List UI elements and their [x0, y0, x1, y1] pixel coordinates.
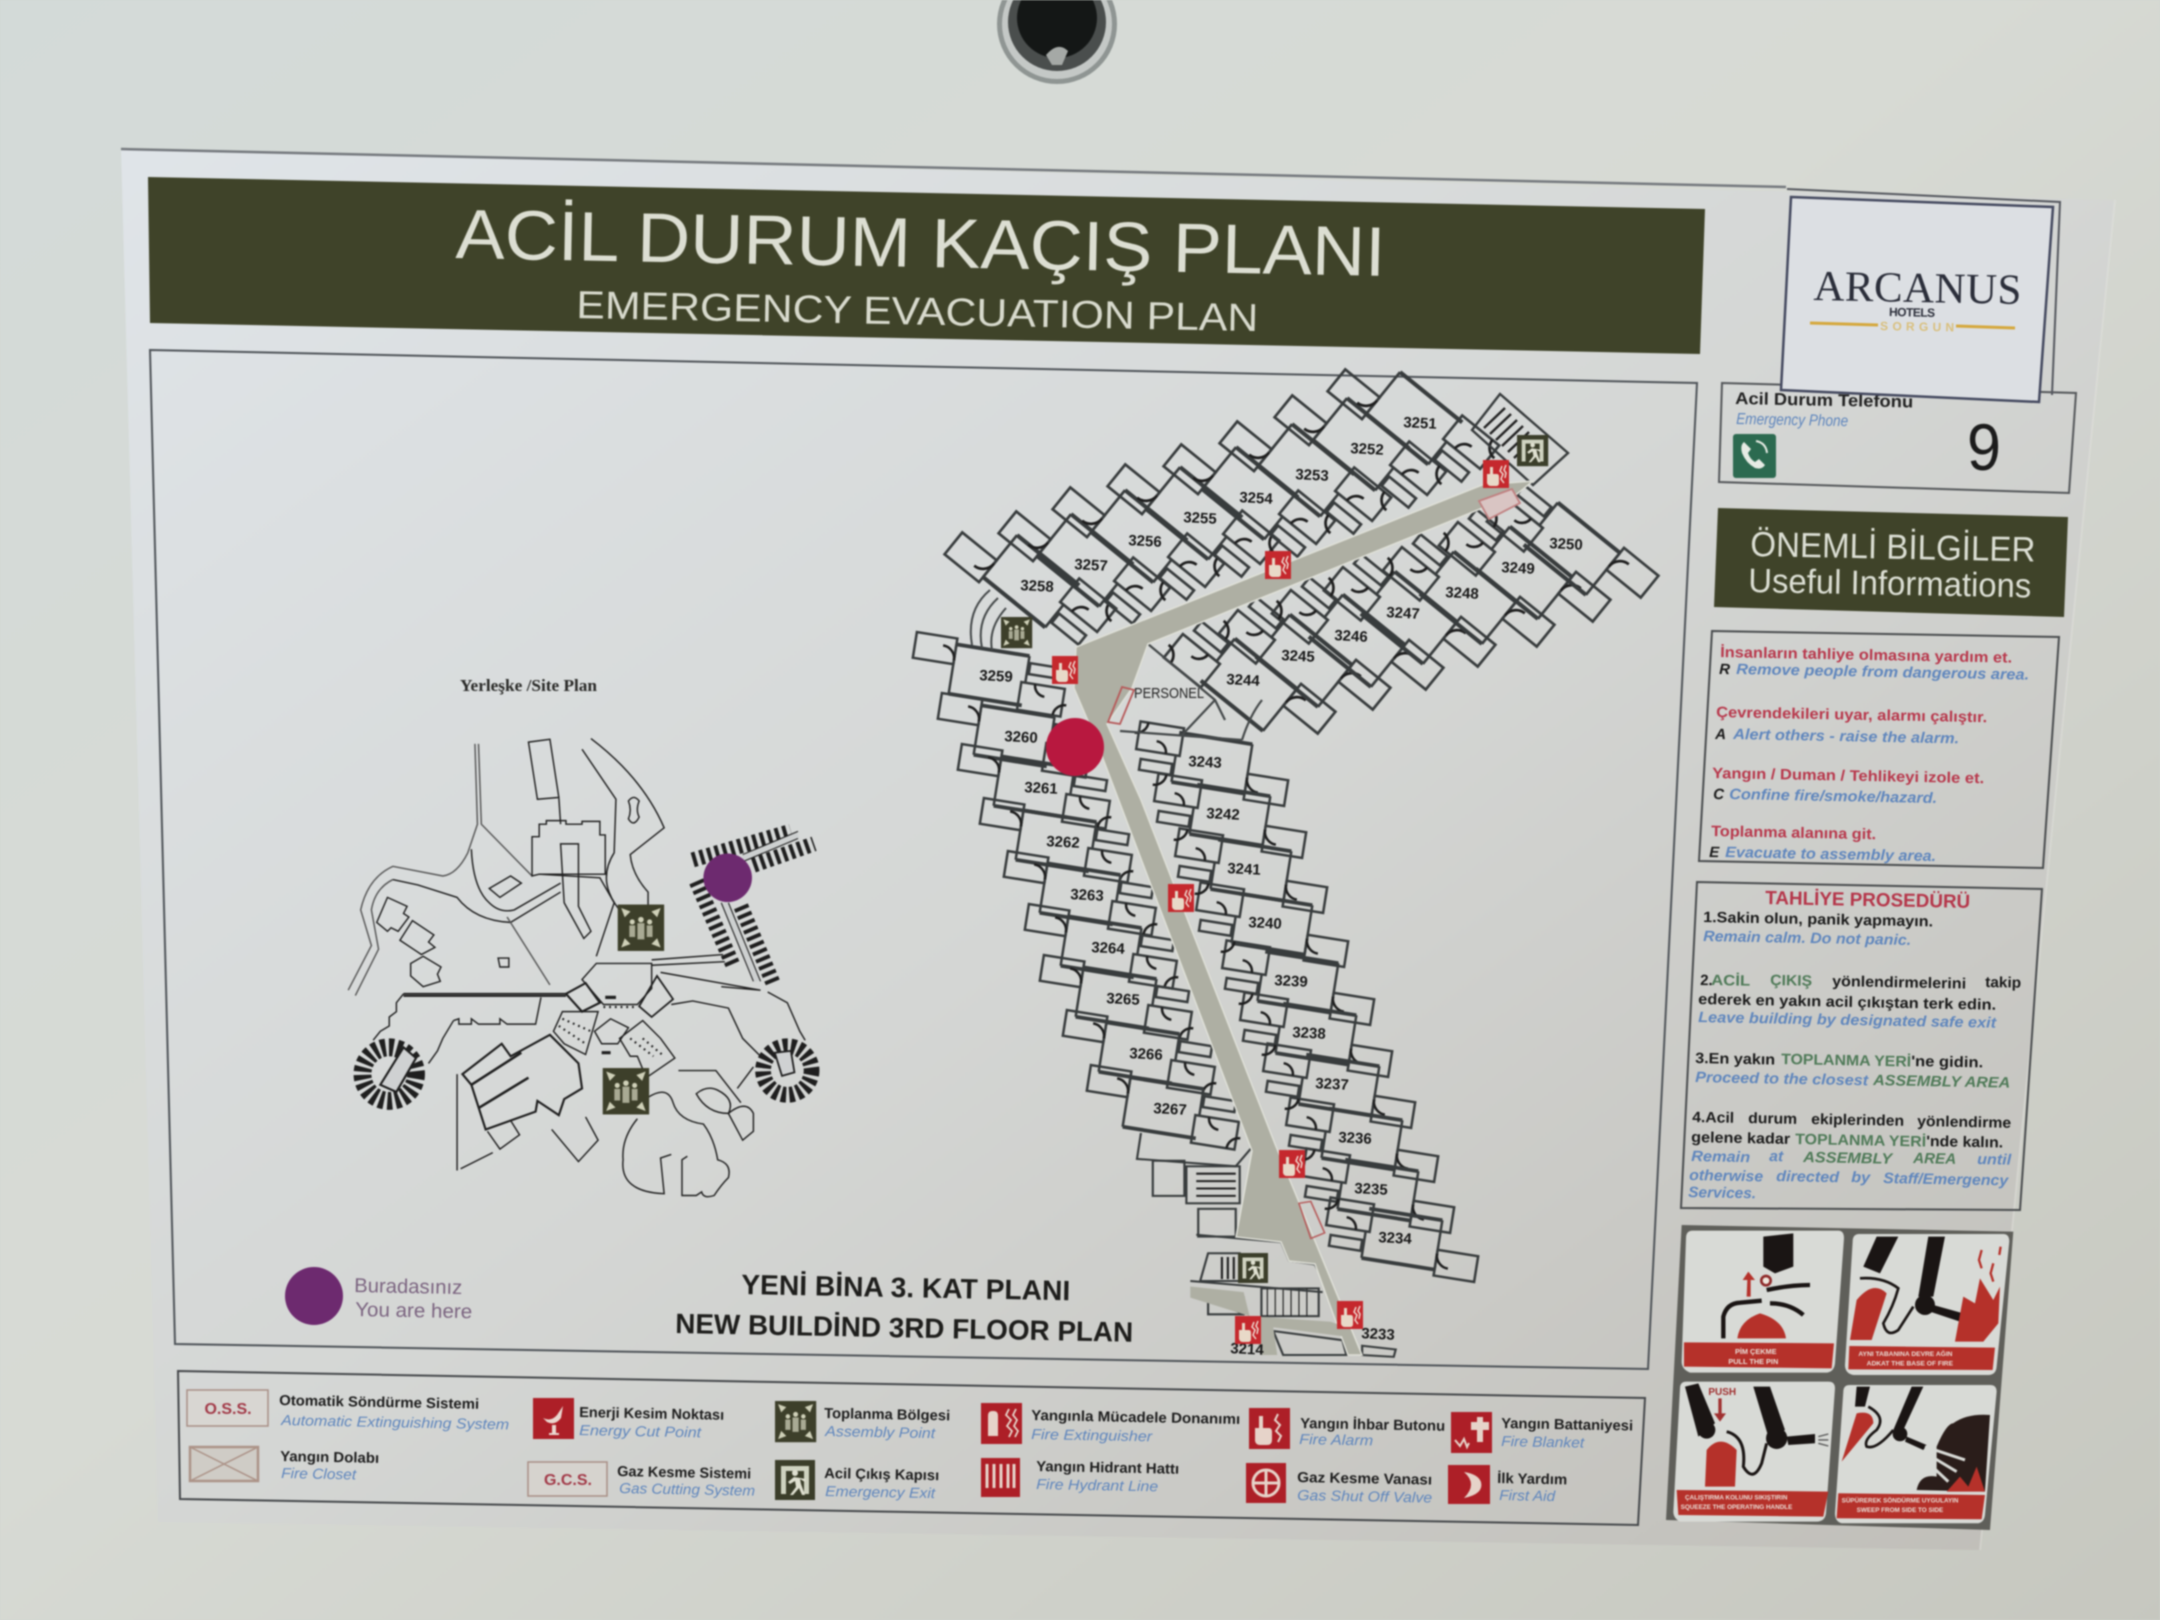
- north wing upper rooms 3251-3258: [945, 340, 1502, 662]
- room numbers: 3267: [1153, 1100, 1187, 1119]
- procedure text lines: yönlendirmelerini: [1832, 973, 1966, 993]
- legend: fire closet: Yangın Dolabı: [280, 1449, 379, 1467]
- north stair core: [1472, 394, 1568, 485]
- site plan drawing: [348, 739, 814, 1197]
- legend: gas shut-off valve: Gaz Kesme Vanası: [1297, 1470, 1432, 1489]
- floor plan heading: YENİ BİNA 3. KAT PLANI: [741, 1269, 1071, 1306]
- room numbers: 3244: [1226, 671, 1261, 690]
- north wing lower rooms 3244-3250: [1161, 468, 1658, 763]
- camera hole: [997, 0, 1117, 84]
- room numbers: 3260: [1004, 728, 1038, 747]
- step 2: aim at base of fire: AYNI TABANINA DEVRE AĞIN: [1858, 1349, 1953, 1358]
- room numbers: 3262: [1046, 833, 1080, 852]
- RACE text lines: Confine fire/smoke/hazard.: [1729, 786, 1937, 807]
- personnel room walls: [1120, 644, 1262, 740]
- procedure text lines: 4.Acil: [1692, 1109, 1734, 1127]
- step 1: pull the pin: [1682, 1231, 1844, 1373]
- legend: fire hydrant line: Yangın Hidrant Hattı: [1036, 1459, 1179, 1478]
- you are here legend: [285, 1267, 472, 1325]
- west stair core: [971, 590, 1006, 650]
- room numbers: 3252: [1350, 440, 1384, 459]
- personnel label: PERSONEL: [1134, 685, 1204, 702]
- floor plan: [907, 340, 1658, 1359]
- step 4: sweep from side to side: SÜPÜREREK SÖNDÜRME UYGULAYIN: [1842, 1496, 1959, 1505]
- map panel frame: [150, 350, 1697, 1369]
- floor plan heading: [675, 1269, 1134, 1348]
- legend: O.S.S.: O.S.S.: [204, 1401, 252, 1418]
- room numbers: 3241: [1227, 860, 1261, 879]
- legend: fire alarm: Fire Alarm: [1299, 1432, 1373, 1449]
- room numbers: 3254: [1239, 489, 1274, 508]
- legend: assembly point: [775, 1401, 950, 1442]
- room numbers: 3243: [1188, 753, 1222, 772]
- useful information banner: [1714, 508, 2068, 617]
- hotel logo card: HOTELS: [1889, 305, 1935, 320]
- legend: fire alarm: [1249, 1408, 1445, 1449]
- procedure text lines: takip: [1985, 974, 2021, 992]
- procedure text lines: Services.: [1688, 1184, 1756, 1202]
- procedure text lines: 2.: [1700, 972, 1713, 989]
- room numbers: 3246: [1334, 627, 1368, 646]
- legend: fire hydrant line: [981, 1458, 1179, 1497]
- room numbers: 3233: [1361, 1325, 1395, 1344]
- step 3: squeeze the handle: ÇALIŞTIRMA KOLUNU SIKIŞTIRIN: [1685, 1494, 1788, 1501]
- RACE text lines: A: [1714, 726, 1726, 743]
- room numbers: 3247: [1386, 604, 1420, 623]
- site plan: assembly point south: [603, 1068, 649, 1114]
- emergency exit markers: [1001, 435, 1548, 1283]
- legend: G.C.S.: [528, 1462, 755, 1500]
- procedure text lines: durum: [1748, 1110, 1797, 1128]
- procedure text lines: 3.En yakın: [1695, 1050, 1775, 1069]
- step 4: sweep from side to side: [1835, 1385, 1997, 1523]
- room numbers: 3253: [1295, 466, 1329, 485]
- RACE information panel: [1699, 631, 2059, 868]
- room numbers: 3261: [1024, 779, 1058, 798]
- legend: fire blanket: Fire Blanket: [1501, 1434, 1585, 1452]
- fire alarm markers: [1052, 460, 1509, 1344]
- legend: O.S.S.: Automatic Extinguishing System: [280, 1413, 509, 1433]
- step 3: squeeze the handle: PUSH: [1708, 1387, 1736, 1398]
- procedure text lines: TOPLANMA YERİ: [1795, 1131, 1926, 1151]
- legend: first aid: [1448, 1465, 1567, 1505]
- phone number: 9: [1967, 410, 2001, 484]
- RACE text lines: Alert others - raise the alarm.: [1732, 726, 1959, 747]
- evacuation procedure panel: [1681, 882, 2042, 1210]
- site plan: east villa cluster: [763, 1046, 812, 1095]
- room numbers: 3264: [1091, 939, 1126, 958]
- current position dot: [1046, 718, 1104, 776]
- legend: gas shut-off valve: Gas Shut Off Valve: [1297, 1488, 1432, 1507]
- you are here legend: Buradasınız: [354, 1275, 462, 1299]
- procedure text lines: TOPLANMA YERİ: [1781, 1051, 1911, 1070]
- site plan: assembly point north: [618, 905, 664, 951]
- emergency phone panel: Acil Durum Telefonu: [1735, 389, 1913, 411]
- room numbers: 3238: [1292, 1024, 1326, 1043]
- site plan: current building miniature: [693, 831, 814, 983]
- procedure text lines: ekiplerinden: [1811, 1111, 1904, 1130]
- RACE text lines: Toplanma alanına git.: [1711, 823, 1876, 843]
- site plan heading: Yerleşke /Site Plan: [460, 676, 598, 695]
- RACE text lines: E: [1709, 844, 1720, 861]
- procedure text lines: 'nde kalın.: [1926, 1133, 2003, 1151]
- legend: G.C.S.: G.C.S.: [544, 1472, 592, 1489]
- useful information banner: Useful Informations: [1748, 562, 2032, 605]
- legend: G.C.S.: Gaz Kesme Sistemi: [617, 1464, 751, 1483]
- site plan: west villa cluster: [362, 1047, 416, 1101]
- legend: fire extinguisher: Yangınla Mücadele Donanımı: [1031, 1408, 1240, 1428]
- room numbers: 3259: [979, 667, 1013, 686]
- room numbers: 3242: [1206, 805, 1240, 824]
- legend: fire closet: Fire Closet: [281, 1466, 357, 1483]
- legend: emergency exit: Acil Çıkış Kapısı: [824, 1466, 939, 1484]
- room numbers: 3214: [1230, 1340, 1265, 1359]
- room numbers: 3239: [1274, 972, 1308, 991]
- east wing rooms 3234-3243: [1127, 721, 1484, 1282]
- room numbers: [979, 414, 1583, 1359]
- room numbers: 3251: [1403, 414, 1437, 433]
- title banner: [148, 177, 1705, 354]
- fire extinguisher instructions: [1666, 1225, 2013, 1530]
- legend: energy cut: Enerji Kesim Noktası: [579, 1405, 724, 1424]
- procedure text lines: [1688, 888, 2021, 1202]
- hotel logo card: [1781, 189, 2060, 402]
- floor plan heading: NEW BUILDİND 3RD FLOOR PLAN: [675, 1308, 1134, 1348]
- legend: O.S.S.: [187, 1390, 509, 1433]
- step 3: squeeze the handle: [1673, 1382, 1835, 1522]
- RACE text lines: Çevrendekileri uyar, alarmı çalıştır.: [1716, 704, 1987, 726]
- room numbers: 3245: [1281, 647, 1315, 666]
- legend: emergency exit: Emergency Exit: [825, 1484, 936, 1502]
- RACE text lines: Remove people from dangerous area.: [1736, 661, 2029, 684]
- legend: fire hydrant line: Fire Hydrant Line: [1036, 1477, 1158, 1495]
- procedure text lines: 'ne gidin.: [1911, 1053, 1983, 1071]
- hotel logo card: ARCANUS: [1813, 263, 2022, 314]
- legend: first aid: İlk Yardım: [1497, 1470, 1567, 1488]
- procedure text lines: 1.Sakin olun, panik yapmayın.: [1703, 909, 1933, 930]
- procedure text lines: ASSEMBLY AREA: [1872, 1072, 2010, 1092]
- legend: energy cut: [533, 1398, 724, 1441]
- legend: O.S.S.: Otomatik Söndürme Sistemi: [279, 1393, 479, 1413]
- procedure text lines: Proceed to the closest: [1695, 1069, 1869, 1089]
- legend panel: [178, 1371, 1645, 1525]
- legend: assembly point: Toplanma Bölgesi: [824, 1406, 950, 1424]
- procedure text lines: at: [1769, 1148, 1784, 1165]
- legend: assembly point: Assembly Point: [824, 1424, 936, 1442]
- procedure text lines: directed: [1776, 1168, 1840, 1186]
- RACE text lines: [1709, 644, 2029, 865]
- legend: energy cut: Energy Cut Point: [579, 1423, 702, 1441]
- icon: telephone: [1733, 434, 1776, 478]
- legend: fire closet: [190, 1447, 379, 1483]
- step 2: aim at base of fire: [1845, 1234, 2009, 1375]
- room numbers: 3256: [1128, 532, 1162, 551]
- procedure text lines: Remain calm. Do not panic.: [1703, 928, 1911, 949]
- legend: emergency exit: [775, 1460, 939, 1502]
- useful information banner: ÖNEMLİ BİLGİLER: [1750, 525, 2036, 569]
- room numbers: 3263: [1070, 886, 1104, 905]
- room numbers: 3249: [1501, 559, 1535, 578]
- step 3: squeeze the handle: SQUEEZE THE OPERATING HANDLE: [1681, 1504, 1792, 1511]
- fire closet hatch marks: [1108, 489, 1520, 1238]
- legend: fire blanket: Yangın Battaniyesi: [1501, 1416, 1633, 1435]
- hotel logo card: SORGUN: [1880, 319, 1954, 334]
- RACE text lines: Yangın / Duman / Tehlikeyi izole et.: [1712, 765, 1984, 787]
- legend: G.C.S.: Gas Cutting System: [619, 1481, 755, 1500]
- procedure text lines: Staff/Emergency: [1883, 1170, 2009, 1189]
- room numbers: 3240: [1248, 914, 1282, 933]
- west wing rooms 3259-3267: [907, 632, 1248, 1150]
- RACE text lines: Evacuate to assembly area.: [1725, 844, 1936, 865]
- legend: fire extinguisher: [981, 1403, 1240, 1445]
- procedure text lines: otherwise: [1689, 1167, 1763, 1185]
- procedure text lines: TAHLİYE PROSEDÜRÜ: [1765, 888, 1970, 913]
- title: Turkish: ACİL DURUM KAÇIŞ PLANI: [455, 195, 1386, 291]
- step 4: sweep from side to side: SWEEP FROM SIDE TO SIDE: [1857, 1507, 1943, 1514]
- evacuation plan sign board: [121, 149, 2115, 1550]
- site plan: you-are-here dot: [703, 853, 752, 902]
- procedure text lines: until: [1977, 1151, 2012, 1169]
- legend: fire extinguisher: Fire Extinguisher: [1031, 1427, 1154, 1445]
- room numbers: 3237: [1315, 1075, 1349, 1094]
- step 2: aim at base of fire: ADKAT THE BASE OF FIRE: [1867, 1360, 1954, 1367]
- room numbers: 3248: [1445, 584, 1479, 603]
- legend: fire alarm: Yangın İhbar Butonu: [1300, 1415, 1445, 1435]
- room numbers: 3236: [1338, 1129, 1372, 1148]
- corridor evacuation route: [1074, 481, 1533, 1355]
- procedure text lines: gelene kadar: [1691, 1129, 1790, 1148]
- RACE text lines: İnsanların tahliye olmasına yardım et.: [1720, 644, 2012, 667]
- step 1: pull the pin: PULL THE PIN: [1728, 1357, 1778, 1366]
- procedure text lines: Leave building by designated safe exit: [1698, 1009, 1997, 1032]
- procedure text lines: AREA: [1912, 1150, 1956, 1168]
- RACE text lines: R: [1719, 661, 1730, 678]
- RACE text lines: C: [1713, 786, 1725, 803]
- procedure text lines: Remain: [1691, 1148, 1750, 1166]
- procedure text lines: ACİL: [1711, 972, 1750, 990]
- procedure text lines: ASSEMBLY: [1802, 1149, 1894, 1168]
- room numbers: 3257: [1074, 556, 1108, 575]
- room numbers: 3235: [1354, 1180, 1388, 1199]
- subtitle: English: EMERGENCY EVACUATION PLAN: [576, 284, 1259, 340]
- procedure text lines: ÇIKIŞ: [1770, 972, 1812, 990]
- procedure text lines: by: [1851, 1169, 1871, 1186]
- room numbers: 3258: [1020, 577, 1054, 596]
- emergency phone panel: Emergency Phone: [1736, 411, 1848, 430]
- legend: gas shut-off valve: [1246, 1463, 1432, 1507]
- procedure text lines: yönlendirme: [1917, 1113, 2011, 1132]
- you are here legend: You are here: [355, 1299, 472, 1323]
- south core: [1137, 1133, 1396, 1357]
- emergency phone panel: [1719, 383, 2076, 493]
- legend: first aid: First Aid: [1499, 1488, 1556, 1505]
- procedure text lines: ederek en yakın acil çıkıştan terk edin.: [1698, 991, 1996, 1014]
- room numbers: 3250: [1549, 535, 1583, 554]
- room numbers: 3255: [1183, 509, 1217, 528]
- legend: fire blanket: [1451, 1412, 1633, 1453]
- room numbers: 3265: [1106, 990, 1140, 1009]
- step 1: pull the pin: PİM ÇEKME: [1735, 1347, 1777, 1356]
- room numbers: 3234: [1378, 1229, 1413, 1248]
- room numbers: 3266: [1129, 1045, 1163, 1064]
